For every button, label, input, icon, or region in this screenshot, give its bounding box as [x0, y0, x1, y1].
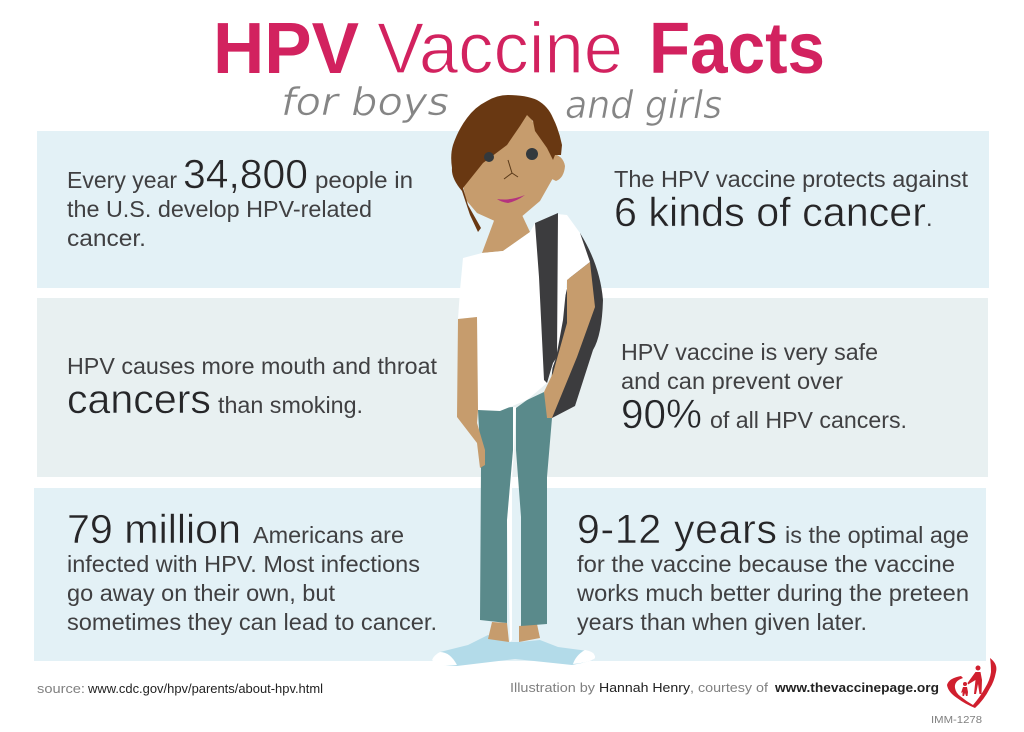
ear	[550, 154, 565, 181]
title: HPV	[213, 9, 359, 89]
panel: bottom band	[34, 488, 986, 661]
text: safety and prevention	[621, 339, 907, 437]
left arm	[457, 317, 485, 468]
text: yearly cancer count	[67, 151, 413, 251]
text: infections: infected with HPV. Most infections	[67, 551, 420, 577]
text: mouth and throat cancers: than smoking.	[218, 392, 363, 418]
shirt	[458, 214, 590, 411]
illustration: child with backpack	[432, 95, 603, 666]
text: yearly cancer count: cancer.	[67, 225, 146, 251]
logo: heart with parent and child	[947, 658, 996, 708]
text: mouth and throat cancers: HPV causes more mouth and throat	[67, 353, 437, 379]
mouth	[497, 195, 525, 203]
source line: www.cdc.gov/hpv/parents/about-hpv.html	[87, 681, 323, 696]
title: Vaccine	[377, 9, 623, 89]
text: safety and prevention: of all HPV cancers.	[710, 407, 907, 433]
text: infections	[67, 506, 437, 635]
text: infections: 79 million	[67, 506, 241, 552]
neck	[482, 215, 530, 253]
face	[463, 112, 556, 222]
ankles	[488, 622, 509, 642]
text: mouth and throat cancers: cancers	[67, 376, 211, 422]
text: infections: sometimes they can lead to cancer.	[67, 609, 437, 635]
text: six kinds of cancer: 6 kinds of cancer	[614, 189, 926, 235]
illustration credit: Illustration by	[510, 680, 596, 695]
document code: IMM-1278	[931, 714, 982, 726]
text: yearly cancer count: people in	[315, 167, 413, 193]
eyes	[484, 152, 494, 162]
title	[213, 9, 825, 89]
text: optimal age: 9-12 years	[577, 506, 777, 552]
text: six kinds of cancer: The HPV vaccine protects against	[614, 166, 968, 192]
text: optimal age: for the vaccine because the vaccine	[577, 551, 955, 577]
text: yearly cancer count: the U.S. develop HPV-related	[67, 196, 372, 222]
text: optimal age: works much better during the preteen	[576, 580, 969, 606]
subtitle: for boys	[281, 80, 449, 124]
text: infections: go away on their own, but	[67, 580, 335, 606]
hair	[451, 95, 562, 232]
illustration credit: , courtesy of	[690, 680, 768, 695]
text: safety and prevention: 90%	[621, 391, 702, 437]
backpack strap	[535, 213, 558, 383]
white strip between the legs	[507, 407, 516, 642]
nose	[504, 160, 518, 179]
text: optimal age: is the optimal age	[785, 522, 969, 548]
backpack	[550, 233, 603, 418]
panel: middle band	[37, 298, 988, 477]
shoes	[432, 635, 595, 666]
text: safety and prevention: and can prevent over	[621, 368, 843, 394]
subtitle	[281, 80, 722, 127]
subtitle: and girls	[565, 83, 722, 127]
text: yearly cancer count: 34,800	[183, 151, 308, 197]
source line: source:	[37, 681, 85, 696]
panel: top band	[37, 131, 989, 288]
title: Facts	[649, 9, 825, 89]
illustration credit	[510, 680, 939, 695]
right arm	[544, 262, 595, 418]
text: six kinds of cancer: .	[926, 205, 933, 231]
text: mouth and throat cancers	[67, 353, 437, 422]
text: safety and prevention: HPV vaccine is very safe	[621, 339, 878, 365]
text: optimal age	[576, 506, 969, 635]
text: infections: Americans are	[253, 522, 404, 548]
trousers	[478, 392, 552, 626]
text: optimal age: years than when given later.	[577, 609, 867, 635]
illustration credit: Hannah Henry	[599, 680, 691, 695]
text: six kinds of cancer	[614, 166, 968, 235]
text: yearly cancer count: Every year	[67, 167, 177, 193]
illustration credit: www.thevaccinepage.org	[774, 680, 939, 695]
